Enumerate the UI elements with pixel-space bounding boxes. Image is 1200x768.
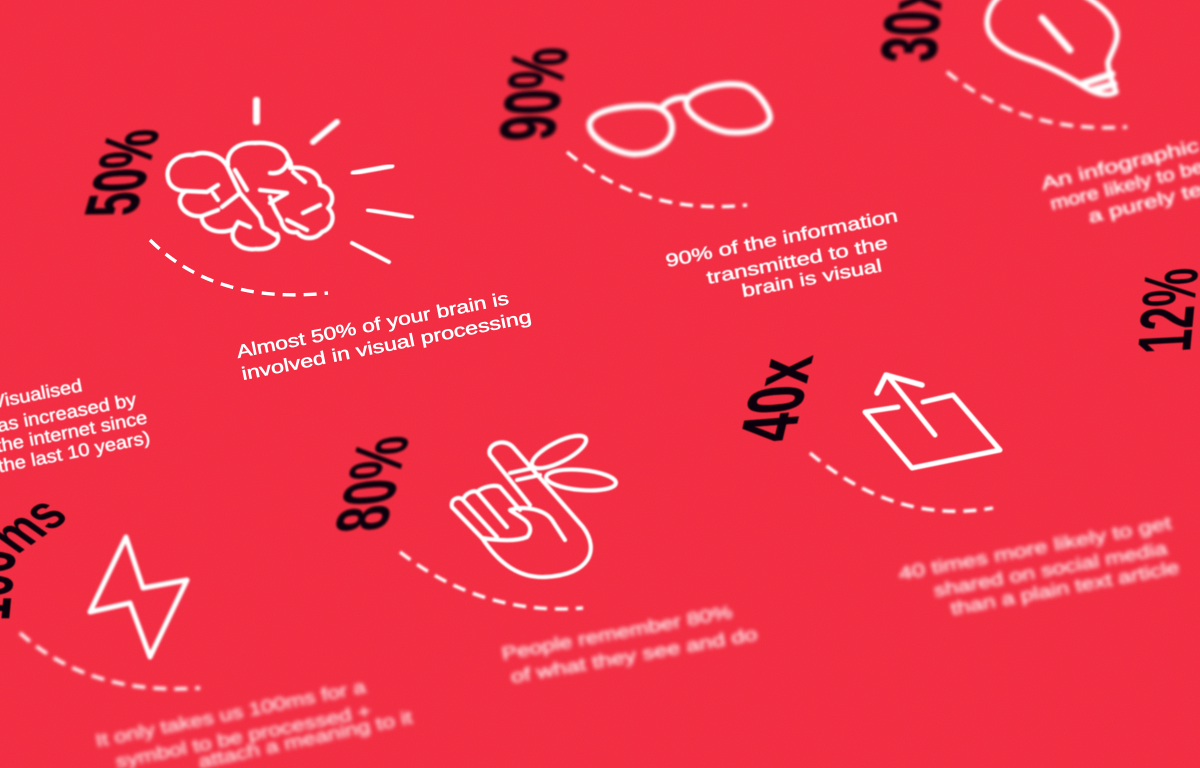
dashed arc <box>947 72 1127 128</box>
stat: 100ms <box>0 487 81 621</box>
caption: 90% of the information <box>664 205 899 271</box>
panel: 30x bulb <box>865 0 1200 227</box>
caption: Almost 50% of your brain is <box>235 288 510 362</box>
dashed arc <box>400 552 583 609</box>
icon: light bulb <box>987 0 1117 94</box>
caption: transmitted to the <box>705 233 889 288</box>
caption: brain is visual <box>740 255 883 301</box>
caption: People remember 80% <box>500 602 734 664</box>
caption <box>897 513 1181 619</box>
caption <box>235 288 533 384</box>
icon: finger with ribbon <box>452 429 617 577</box>
caption <box>664 205 899 301</box>
panel: 100ms lightning <box>0 487 414 768</box>
icon: lightning bolt <box>90 537 187 657</box>
caption: of what they see and do <box>509 624 759 687</box>
stat: 50%: 50% <box>69 128 176 218</box>
dashed arc <box>567 152 747 207</box>
caption <box>94 676 414 768</box>
panel: 50% brain <box>69 97 533 384</box>
caption <box>1039 118 1200 227</box>
caption: 40 times more likely to get <box>897 513 1173 584</box>
dashed arc <box>20 633 200 689</box>
stat: 40x: 40x <box>724 354 831 445</box>
stat: 90%: 90% <box>481 47 585 142</box>
dashed arc <box>810 453 993 511</box>
caption: shared on social media <box>932 538 1170 601</box>
panel: visualised data caption <box>0 376 152 482</box>
dashed arc <box>150 240 328 295</box>
stat: 80%: 80% <box>319 433 426 535</box>
panel: 90% glasses <box>481 47 899 301</box>
icon: share arrow in box <box>865 375 1000 468</box>
caption: It only takes us 100ms for a <box>94 676 368 751</box>
panel: 40x share <box>724 354 1181 619</box>
panel: 80% memory <box>319 429 759 687</box>
caption: than a plain text article <box>949 557 1181 619</box>
icon: glasses <box>590 84 770 154</box>
icon: brain with rays <box>168 97 412 262</box>
caption <box>500 602 759 687</box>
caption: involved in visual processing <box>240 307 533 384</box>
